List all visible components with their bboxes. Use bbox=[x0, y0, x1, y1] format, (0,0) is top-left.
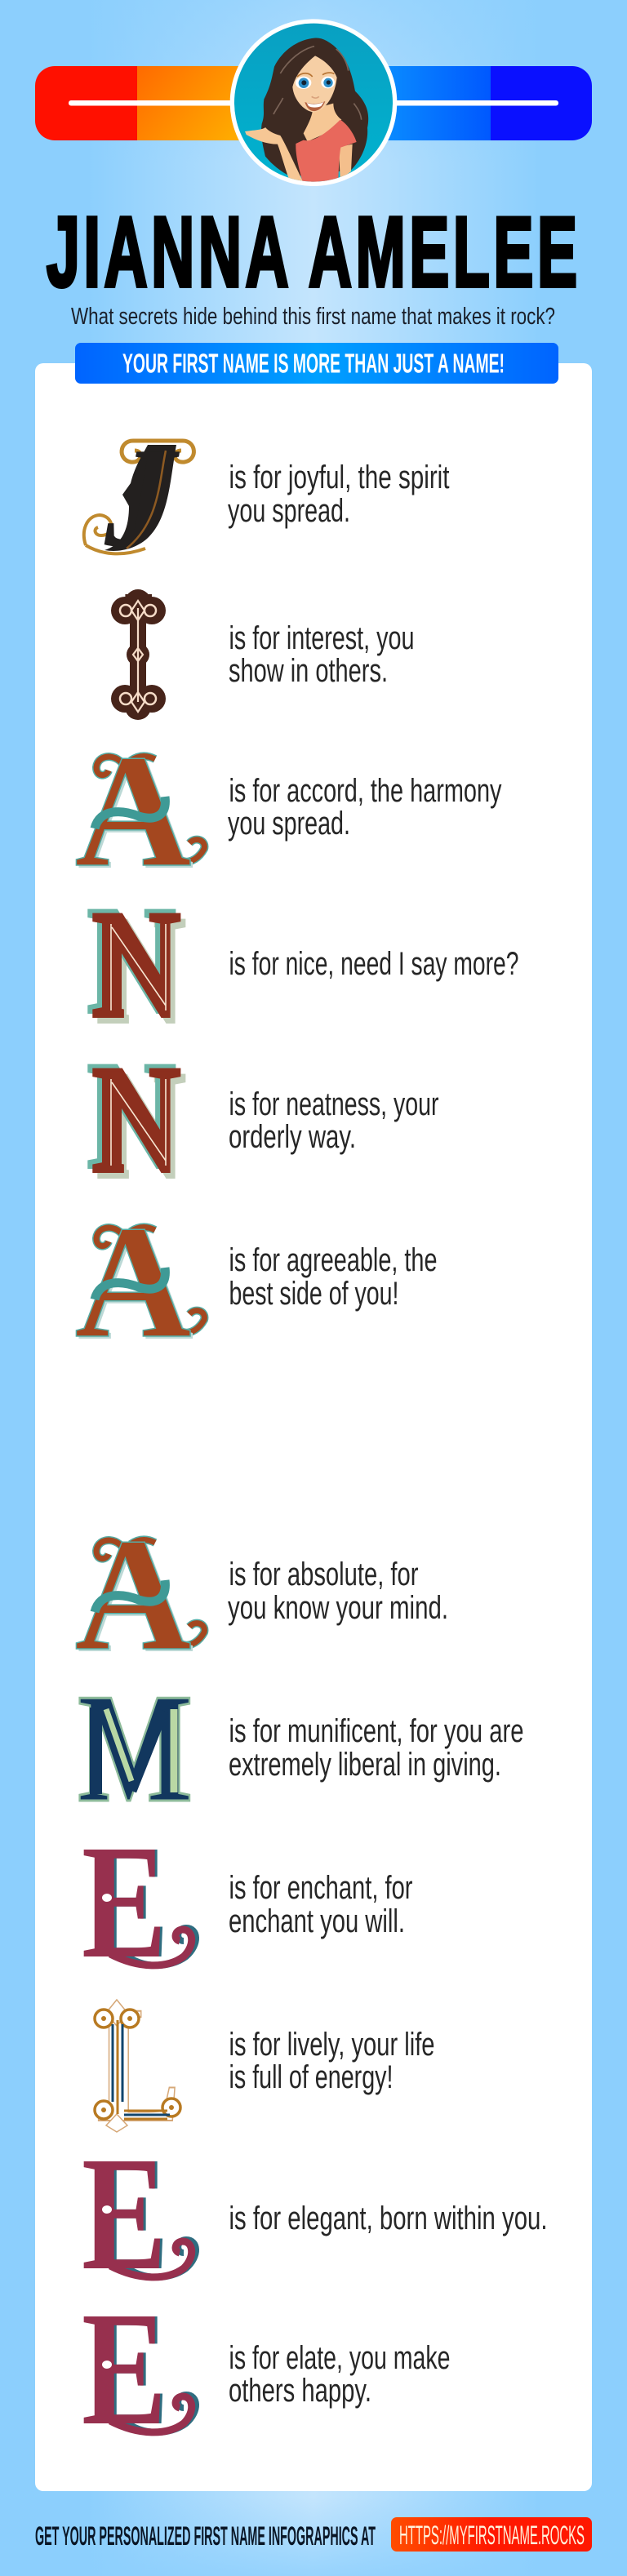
avatar portrait bbox=[230, 19, 397, 186]
text: accord: is for accord, the harmony bbox=[229, 773, 501, 809]
letter L: L bbox=[96, 1973, 180, 2157]
letter A: A bbox=[75, 1505, 191, 1684]
text: enchant: is for enchant, for bbox=[229, 1870, 413, 1906]
text: interest: is for interest, you bbox=[229, 620, 415, 656]
letter I bbox=[111, 553, 166, 752]
arm bbox=[245, 127, 304, 185]
text: lively bbox=[229, 2027, 434, 2095]
neck and chest bbox=[304, 104, 341, 141]
shirt bbox=[296, 120, 357, 185]
letter N: N bbox=[96, 885, 186, 1056]
text: joyful: you spread. bbox=[228, 493, 350, 529]
text: agreeable: is for agreeable, the bbox=[229, 1242, 438, 1278]
text: agreeable bbox=[229, 1242, 438, 1312]
text: munificent bbox=[229, 1713, 524, 1783]
text: munificent: extremely liberal in giving. bbox=[229, 1747, 501, 1783]
text: accord bbox=[228, 773, 501, 842]
letter E: E bbox=[84, 2123, 169, 2303]
letter E: E bbox=[82, 2278, 167, 2458]
letter A: A bbox=[75, 722, 191, 900]
text: elate bbox=[229, 2340, 451, 2409]
panel: letters bbox=[35, 363, 592, 2491]
letter A: A bbox=[77, 724, 194, 903]
banner bbox=[75, 343, 558, 384]
text: nice: is for nice, need I say more? bbox=[229, 946, 519, 982]
text: lively: is for lively, your life bbox=[229, 2027, 434, 2063]
nose and smile bbox=[305, 101, 325, 111]
letter J bbox=[84, 418, 193, 576]
letter N: N bbox=[91, 1034, 181, 1206]
title: JIANNA AMELEE bbox=[47, 197, 581, 308]
letter A: A bbox=[75, 1193, 191, 1371]
text: absolute: you know your mind. bbox=[228, 1590, 448, 1626]
header colour bar bbox=[35, 66, 592, 140]
letter N: N bbox=[87, 1030, 176, 1201]
letter N: N bbox=[91, 879, 181, 1050]
letter I: I bbox=[122, 553, 154, 752]
text: neatness: orderly way. bbox=[229, 1119, 356, 1155]
face bbox=[292, 56, 337, 112]
text: accord: you spread. bbox=[228, 806, 350, 842]
text: elate: is for elate, you make bbox=[229, 2340, 451, 2376]
hair bbox=[261, 38, 368, 177]
letter N: N bbox=[87, 875, 176, 1046]
text: absolute: is for absolute, for bbox=[229, 1557, 418, 1592]
letter M: M bbox=[78, 1663, 193, 1835]
letter E: E bbox=[84, 2278, 169, 2458]
text: munificent: is for munificent, for you are bbox=[229, 1713, 524, 1749]
text: agreeable: best side of you! bbox=[229, 1276, 398, 1312]
letter J: J bbox=[104, 418, 180, 576]
letter E: E bbox=[84, 1811, 169, 1992]
letter E: E bbox=[82, 1811, 167, 1992]
text: joyful bbox=[228, 460, 449, 529]
text: joyful: is for joyful, the spirit bbox=[229, 460, 449, 495]
text: lively: is full of energy! bbox=[229, 2059, 394, 2095]
letter N: N bbox=[96, 1040, 186, 1211]
text: interest: show in others. bbox=[229, 653, 388, 689]
text: absolute bbox=[228, 1557, 448, 1626]
letter E: E bbox=[82, 2123, 167, 2303]
text: elate: others happy. bbox=[229, 2373, 371, 2409]
text: enchant: enchant you will. bbox=[229, 1903, 405, 1939]
text: neatness: is for neatness, your bbox=[229, 1086, 439, 1122]
text: neatness bbox=[229, 1086, 439, 1155]
text: enchant bbox=[229, 1870, 413, 1939]
letter A: A bbox=[77, 1508, 194, 1686]
text: interest bbox=[229, 620, 415, 689]
letter A: A bbox=[77, 1195, 194, 1374]
eyes bbox=[296, 77, 335, 89]
